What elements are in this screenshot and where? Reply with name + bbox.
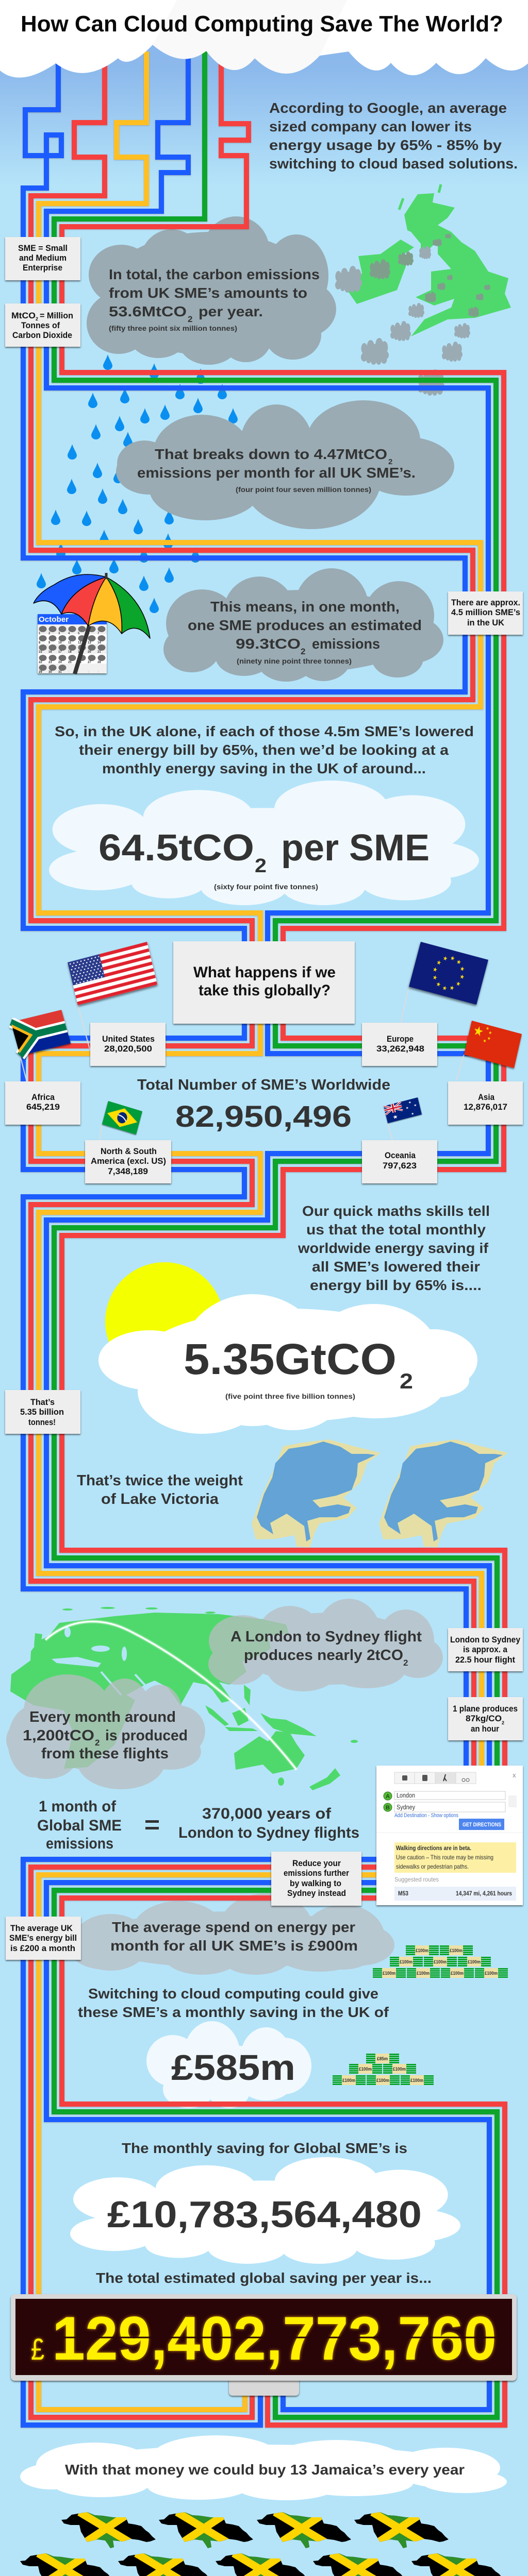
calendar: 15: [39, 651, 42, 654]
box: North and South America: [85, 1140, 171, 1183]
text: flight emissions: [230, 1629, 422, 1668]
calendar: 3: [58, 632, 60, 635]
Shetland and Hebrides: [399, 184, 441, 210]
text: one SME monthly: emissions: [312, 636, 380, 652]
note: flight duration: 22.5 hour flight: [455, 1655, 515, 1665]
blue pipe G: [23, 57, 466, 2425]
note: average SME bill: SME’s energy bill: [9, 1933, 77, 1943]
money stack: 585m: £85m: [377, 2056, 388, 2061]
stat: 5.35GtCO2: 2: [400, 1369, 413, 1393]
box: North and South America: America (excl. US): [91, 1156, 166, 1166]
note: flight duration: [448, 1628, 523, 1671]
small clouds over land: [370, 233, 490, 317]
box: Oceania: [362, 1140, 437, 1183]
calendar: 20: [88, 651, 91, 654]
money stack: 900m: £100m: [417, 1971, 430, 1976]
lake victoria right: [379, 1439, 508, 1547]
text: buy Jamaicas: With that money we could buy 13 Jamaica’s every year: [65, 2462, 465, 2478]
calendar: 3: [88, 671, 90, 674]
money stack: 585m: £100m: [393, 2066, 406, 2072]
intro text: energy usage by 65% - 85% by: [269, 137, 502, 153]
box: North and South America: 7,348,189: [108, 1166, 148, 1176]
flag: European Union: [409, 942, 488, 1005]
note: 5.35 billion tonnes: That’s: [30, 1397, 55, 1407]
money stack: 585m: £100m: [376, 2078, 389, 2083]
cloud: 585m backdrop: [146, 2021, 311, 2108]
box: Africa: 645,219: [26, 1102, 60, 1112]
text: quick maths: [298, 1203, 490, 1293]
calendar: 27: [88, 661, 91, 664]
note: MtCO2 definition: Carbon Dioxide: [12, 330, 72, 340]
money stack: 585m: £100m: [342, 2078, 355, 2083]
note: flight duration: is approx. a: [463, 1645, 507, 1654]
calendar: 23: [48, 661, 52, 664]
transport mode buttons: [394, 1772, 476, 1784]
text: monthly breakdown: That breaks down to 4.47MtCO: [155, 446, 387, 462]
flag: Brazil: [102, 1101, 142, 1134]
box: Asia: [448, 1081, 523, 1125]
intro text: According to Google, an average: [269, 100, 507, 116]
route inputs: B: [386, 1805, 390, 1811]
umbrella handle: [75, 626, 89, 674]
text: quick maths: energy bill by 65% is....: [310, 1277, 482, 1293]
text: quick maths: worldwide energy saving if: [298, 1240, 489, 1256]
lake victoria left: [252, 1439, 381, 1547]
stat: 64.5tCO2 per SME: per SME: [281, 827, 430, 869]
note: 5.35 billion tonnes: 5.35 billion: [20, 1407, 64, 1417]
digital display: yearly saving: [11, 2294, 517, 2396]
umbrella over calendar: [34, 573, 150, 674]
note: plane emissions: [448, 1697, 523, 1740]
text: UK saving intro: [55, 723, 474, 776]
note: walk to Sydney: emissions further: [284, 1868, 349, 1878]
calendar: 25: [68, 661, 72, 664]
box: Europe: 33,262,948: [376, 1044, 424, 1054]
money stack: 900m: £100m: [451, 1971, 464, 1976]
stat: 64.5tCO2 per SME: 2: [255, 855, 267, 877]
text: one SME monthly: 2: [301, 647, 305, 656]
yellow pipe o: [39, 52, 482, 2410]
note: number of UK SMEs: [448, 591, 523, 635]
text: UK carbon emissions: from UK SME’s amounts to: [109, 285, 307, 301]
note: walk to Sydney: Reduce your: [292, 1858, 341, 1868]
stat: total SMEs worldwide: Total Number of SME’s Worldwide: [137, 1077, 390, 1093]
Great Britain: [404, 193, 511, 336]
grey cloud: per SME: [163, 568, 443, 682]
money stack: 900m: £100m: [485, 1971, 498, 1976]
panel: walking directions widget: Suggested routes: [394, 1876, 439, 1883]
text: monthly flights: is produced: [105, 1727, 188, 1744]
route inputs: London: [397, 1791, 415, 1799]
title: How Can Cloud Computing Save The World?: [21, 11, 503, 37]
equation: global emissions equal flights: [37, 1798, 359, 1852]
text: monthly flights: 2: [95, 1738, 100, 1748]
cloud: Jamaica backdrop: [20, 2435, 507, 2500]
note: plane emissions: 1 plane produces: [453, 1704, 518, 1714]
calendar: 28: [97, 661, 101, 664]
top cloud banner: [0, 0, 528, 78]
grey cloud: energy spend: [72, 1893, 394, 1975]
text: one SME monthly: (ninety nine point three tonnes): [237, 657, 352, 665]
display digits: 129,402,773,760: [52, 2304, 497, 2373]
note: plane emissions: an hour: [471, 1724, 499, 1734]
calendar: 21: [97, 651, 101, 654]
text: monthly breakdown: emissions per month for all UK SME’s.: [137, 465, 416, 481]
calendar: 2: [78, 671, 80, 674]
note: 5.35 billion tonnes: [5, 1390, 80, 1434]
calendar: 2: [48, 632, 51, 635]
flag: Australia: [384, 1097, 422, 1123]
text: average spend: month for all UK SME’s is £900m: [110, 1938, 358, 1954]
text: UK carbon emissions: In total, the carbon emissions: [109, 266, 320, 282]
intro text: sized company can lower its: [269, 118, 472, 134]
grey cloud: flight: [208, 1599, 443, 1691]
text: one SME monthly: This means, in one month,: [210, 599, 400, 615]
equation: global emissions equal flights: Global SME: [37, 1817, 122, 1834]
text: monthly flights: from these flights: [41, 1745, 169, 1762]
calendar: 31: [58, 671, 62, 674]
box: Africa: Africa: [31, 1092, 55, 1102]
equation: global emissions equal flights: emissions: [46, 1835, 113, 1852]
calendar: 5: [78, 632, 80, 635]
panel: walking directions widget: x: [513, 1771, 516, 1779]
text: flight emissions: produces nearly 2tCO: [244, 1647, 403, 1664]
equation: global emissions equal flights: 370,000 years of: [202, 1805, 332, 1822]
money stack: 900m: £100m: [400, 1959, 412, 1964]
calendar: 8: [39, 641, 41, 645]
note: flight duration: London to Sydney: [450, 1635, 520, 1645]
display stand: [229, 2378, 299, 2396]
route result: 14,347 mi, 4,261 hours: [456, 1890, 512, 1897]
text: UK saving intro: their energy bill by 65%, then we’d be looking at a: [79, 742, 449, 758]
flag: United States: [68, 942, 157, 1005]
note: MtCO2 definition: 2: [36, 316, 38, 321]
walking warning: sidewalks or pedestrian paths.: [396, 1863, 469, 1870]
stat: global monthly saving: £10,783,564,480: [107, 2194, 422, 2235]
walking warning: Walking directions are in beta.: [396, 1844, 471, 1852]
sun: [105, 1262, 224, 1381]
stat: 5.35GtCO2: 5.35GtCO: [184, 1335, 397, 1383]
box: United States: [90, 1023, 166, 1066]
note: average SME bill: The average UK: [10, 1923, 73, 1933]
world map: [10, 1607, 358, 1790]
route inputs: A: [386, 1793, 390, 1800]
flight arc: [45, 1621, 296, 1770]
text: average spend: [110, 1919, 358, 1954]
note: SME definition: Enterprise: [23, 263, 62, 273]
text: switching saving: [78, 1986, 389, 2020]
text: Lake Victoria: That’s twice the weight: [77, 1472, 243, 1489]
note: average SME bill: [6, 1917, 81, 1960]
text: switching saving: these SME’s a monthly saving in the UK of: [78, 2004, 389, 2020]
money stack: 900m: £100m: [468, 1959, 481, 1964]
calendar: October: [39, 615, 69, 624]
text: flight emissions: 2: [403, 1658, 408, 1668]
small clouds over water: [335, 246, 470, 396]
green pipe l: [54, 49, 497, 2417]
calendar: 29: [39, 671, 42, 674]
grey cloud: monthly flights: [6, 1674, 205, 1789]
stat: total SMEs worldwide: 82,950,496: [175, 1100, 352, 1133]
money stack: 585m: £100m: [359, 2066, 372, 2072]
text: flight emissions: A London to Sydney flight: [230, 1629, 422, 1645]
text: monthly flights: Every month around: [29, 1709, 176, 1725]
cloud: global monthly saving backdrop: [70, 2157, 460, 2264]
calendar: 24: [58, 661, 62, 664]
box: Asia: 12,876,017: [464, 1102, 507, 1112]
stat: total SMEs worldwide: [137, 1077, 390, 1133]
box: Europe: [362, 1023, 437, 1066]
route result: [394, 1887, 516, 1901]
note: walk to Sydney: by walking to: [290, 1878, 341, 1888]
text: quick maths: us that the total monthly: [306, 1222, 486, 1238]
calendar: 16: [48, 651, 52, 654]
text: one SME monthly: [188, 599, 422, 665]
calendar: 7: [97, 632, 100, 635]
panel: what happens globally: take this globally?: [199, 982, 331, 999]
note: SME definition: [5, 237, 80, 280]
text: monthly breakdown: (four point four seven million tonnes): [236, 485, 371, 494]
cloud: 64.5 backdrop: [49, 781, 479, 905]
text: Lake Victoria: [77, 1472, 243, 1507]
calendar: 12: [78, 641, 81, 645]
rain drops: [37, 354, 238, 613]
get directions button: [459, 1819, 504, 1830]
calendar: 26: [78, 661, 81, 664]
stat: 64.5tCO2 per SME: 64.5tCO: [98, 827, 254, 869]
note: walk to Sydney: [271, 1852, 361, 1906]
text: one SME monthly: 99.3tCO: [236, 636, 301, 652]
red pipe e: [62, 62, 505, 2425]
money stack: 900m: £100m: [416, 1948, 428, 1953]
box: Europe: Europe: [387, 1034, 414, 1044]
note: MtCO2 definition: Tonnes of: [21, 320, 60, 330]
note: MtCO2 definition: MtCO: [11, 311, 36, 320]
box: United States: United States: [102, 1034, 155, 1044]
panel: what happens globally: What happens if we: [193, 964, 336, 981]
Jamaica maps row 2: [20, 2553, 506, 2576]
stat: 64.5tCO2 per SME: [98, 827, 430, 891]
note: SME definition: SME = Small: [18, 243, 68, 253]
heading: yearly global saving: The total estimated global saving per year is...: [96, 2270, 432, 2286]
note: number of UK SMEs: There are approx.: [451, 598, 520, 607]
Ireland: [349, 240, 414, 304]
route inputs: Sydney: [397, 1803, 415, 1811]
calendar: 6: [88, 632, 90, 635]
intro text: switching to cloud based solutions.: [269, 156, 518, 172]
text: UK carbon emissions: [109, 266, 320, 332]
calendar: 10: [58, 641, 62, 645]
text: monthly breakdown: 2: [388, 457, 392, 466]
display digits: £: [31, 2333, 44, 2366]
text: quick maths: all SME’s lowered their: [312, 1259, 480, 1275]
text: Lake Victoria: of Lake Victoria: [101, 1491, 219, 1507]
Jamaica maps row 1: [61, 2512, 449, 2549]
note: 5.35 billion tonnes: tonnes!: [28, 1417, 56, 1427]
money stack: 900m: [373, 1945, 508, 1978]
text: average spend: The average spend on energy per: [112, 1919, 355, 1935]
walking warning: [394, 1842, 516, 1873]
note: plane emissions: 87kg/CO: [466, 1714, 502, 1723]
money stack: 900m: £100m: [434, 1959, 447, 1964]
calendar: 17: [58, 651, 62, 654]
route inputs: [384, 1791, 517, 1812]
text: monthly flights: [23, 1709, 188, 1762]
stat: 5.35GtCO2: (five point three five billion tonnes): [225, 1392, 355, 1400]
stat: 64.5tCO2 per SME: (sixty four point five tonnes): [214, 883, 318, 891]
calendar: 4: [68, 632, 70, 635]
note: MtCO2 definition: = Million: [40, 311, 73, 320]
panel: walking directions widget: Add Destination - Show options: [394, 1812, 458, 1819]
box: Oceania: Oceania: [385, 1150, 416, 1160]
grey cloud: carbon emissions: [87, 216, 336, 365]
equation: global emissions equal flights: London to Sydney flights: [178, 1824, 359, 1841]
note: MtCO2 definition: [5, 303, 80, 347]
text: UK saving intro: monthly energy saving in the UK of around...: [102, 760, 426, 776]
flag: China: [464, 1021, 522, 1068]
note: walk to Sydney: Sydney instead: [287, 1888, 346, 1898]
text: UK carbon emissions: (fifty three point six million tonnes): [109, 324, 237, 332]
box: Africa: [5, 1081, 80, 1125]
calendar: 1: [68, 671, 70, 674]
calendar: 4: [97, 671, 100, 674]
calendar: 14: [97, 641, 101, 645]
calendar: 19: [78, 651, 81, 654]
flag poles: [20, 987, 464, 1140]
note: number of UK SMEs: 4.5 million SME’s: [451, 607, 520, 617]
money stack: 900m: £100m: [450, 1948, 463, 1953]
cloud: 5.35 backdrop: [98, 1294, 477, 1434]
text: quick maths: Our quick maths skills tell: [302, 1203, 490, 1219]
text: monthly flights: 1,200tCO: [23, 1727, 94, 1744]
walking warning: Use caution – This route may be missing: [396, 1854, 493, 1861]
stat: 5.35GtCO2: [184, 1335, 413, 1400]
box: Asia: Asia: [478, 1092, 494, 1102]
box: North and South America: North & South: [101, 1146, 157, 1156]
box: United States: 28,020,500: [104, 1044, 152, 1054]
red pipe o: [31, 62, 474, 2417]
text: UK carbon emissions: per year.: [199, 303, 263, 319]
calendar: 30: [48, 671, 52, 674]
stat: 585m: £585m: [171, 2047, 295, 2088]
equation: global emissions equal flights: 1 month of: [39, 1798, 117, 1815]
text: one SME monthly: one SME produces an estimated: [188, 617, 422, 633]
route result: M53: [398, 1890, 408, 1897]
blue pipe g: [46, 52, 489, 2410]
get directions button: GET DIRECTIONS: [463, 1822, 501, 1828]
heading: monthly global saving: The monthly saving for Global SME’s is: [122, 2140, 407, 2156]
text: UK carbon emissions: 53.6MtCO: [109, 303, 187, 319]
calendar: 9: [48, 641, 51, 645]
panel: walking directions widget: [376, 1766, 523, 1905]
grey cloud: monthly breakdown: [116, 400, 454, 529]
display frame: [11, 2294, 517, 2381]
flag: South Africa: [11, 1010, 71, 1056]
note: plane emissions: 2: [502, 1720, 504, 1725]
calendar: [38, 614, 107, 674]
note: SME definition: and Medium: [19, 253, 67, 263]
note: number of UK SMEs: in the UK: [467, 618, 505, 628]
text: UK carbon emissions: 2: [188, 314, 192, 324]
text: monthly breakdown: [137, 446, 416, 494]
calendar: 11: [68, 641, 72, 645]
panel: what happens globally: [173, 941, 355, 1024]
calendar: 18: [68, 651, 72, 654]
text: UK saving intro: So, in the UK alone, if each of those 4.5m SME’s lowered: [55, 723, 474, 739]
money stack: 585m: [333, 2054, 434, 2085]
calendar: 13: [88, 641, 91, 645]
note: average SME bill: is £200 a month: [10, 1943, 75, 1953]
calendar: 22: [39, 661, 42, 664]
map: UK and Ireland: [335, 184, 511, 396]
intro text: [269, 100, 518, 172]
text: switching saving: Switching to cloud computing could give: [88, 1986, 378, 2002]
money stack: 585m: £100m: [410, 2078, 423, 2083]
umbrella canopy: [34, 574, 150, 638]
box: Oceania: 797,623: [383, 1161, 417, 1171]
calendar: 1: [39, 632, 41, 635]
money stack: 900m: £100m: [383, 1971, 395, 1976]
